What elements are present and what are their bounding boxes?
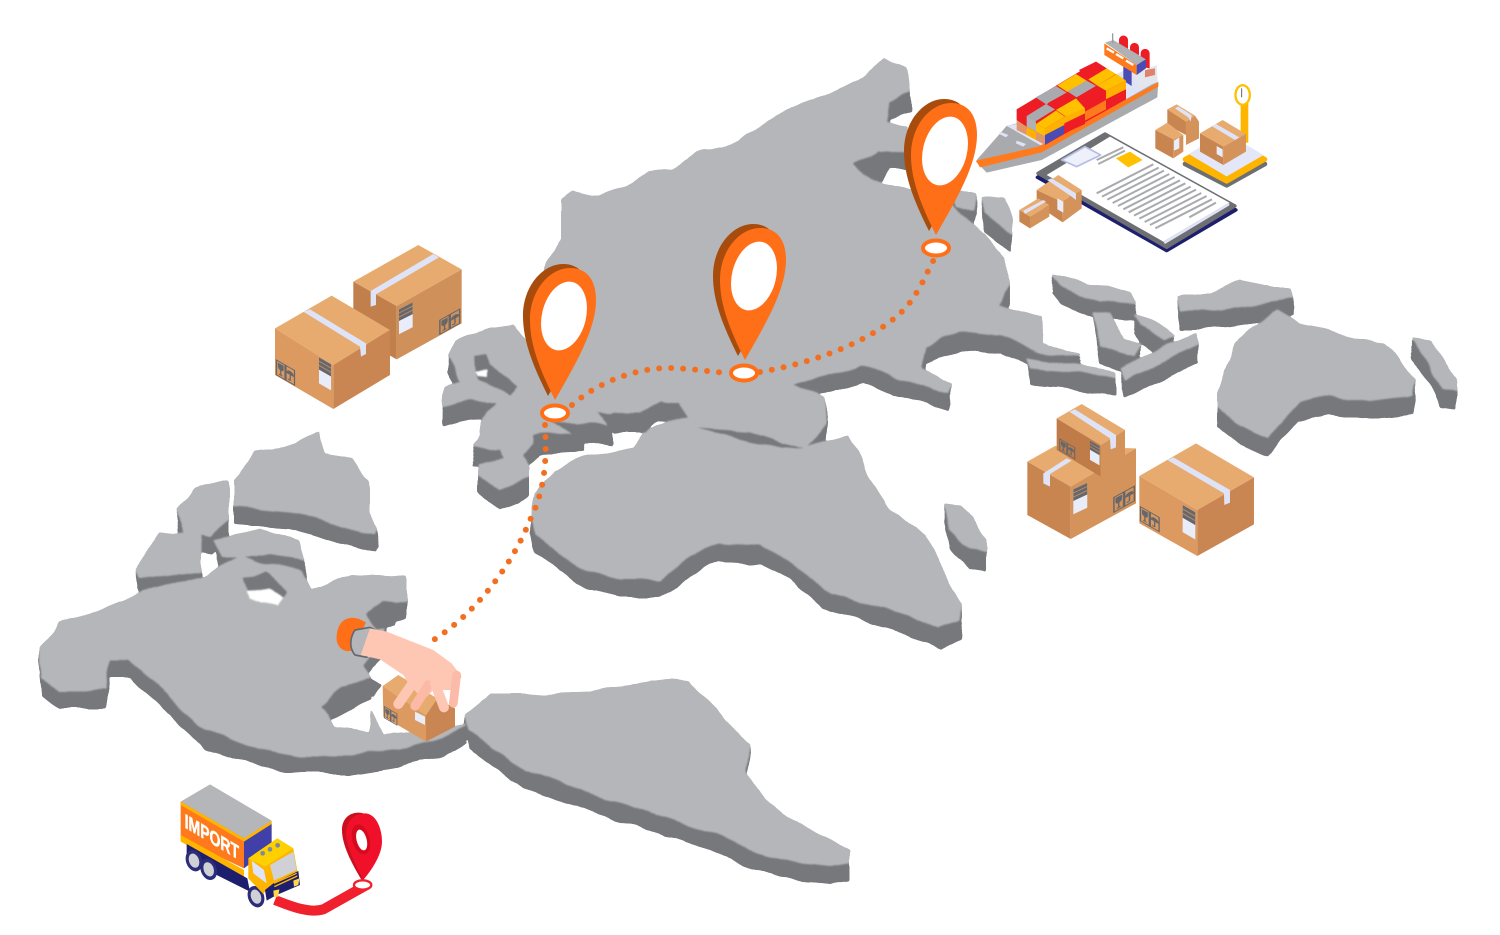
icon: clipboard document [1037,134,1236,251]
red road [275,885,367,911]
dotted route [425,258,935,645]
icon: parcels on clipboard [1019,175,1082,228]
icon: orange cuff [337,618,366,651]
hand placing parcel [337,618,462,742]
location pin: Far East [904,99,977,256]
icon: hand [361,628,462,707]
icon: weighing scale with parcel [1155,84,1265,185]
truck with red route [181,784,382,911]
parcels: stack on the right [1027,404,1254,556]
location pin: Europe [523,264,596,420]
logistics cluster: ship, clipboard, scale [976,33,1265,251]
parcels: pair on the left [275,245,462,409]
icon: parcel [383,675,455,742]
icon: container ship [976,33,1158,173]
icon: red destination pin [342,813,382,890]
truck label: IMPORT [185,809,239,864]
icon: grey sleeve [351,627,382,657]
icon: truck [181,784,300,910]
location pin: Asia [713,224,786,380]
